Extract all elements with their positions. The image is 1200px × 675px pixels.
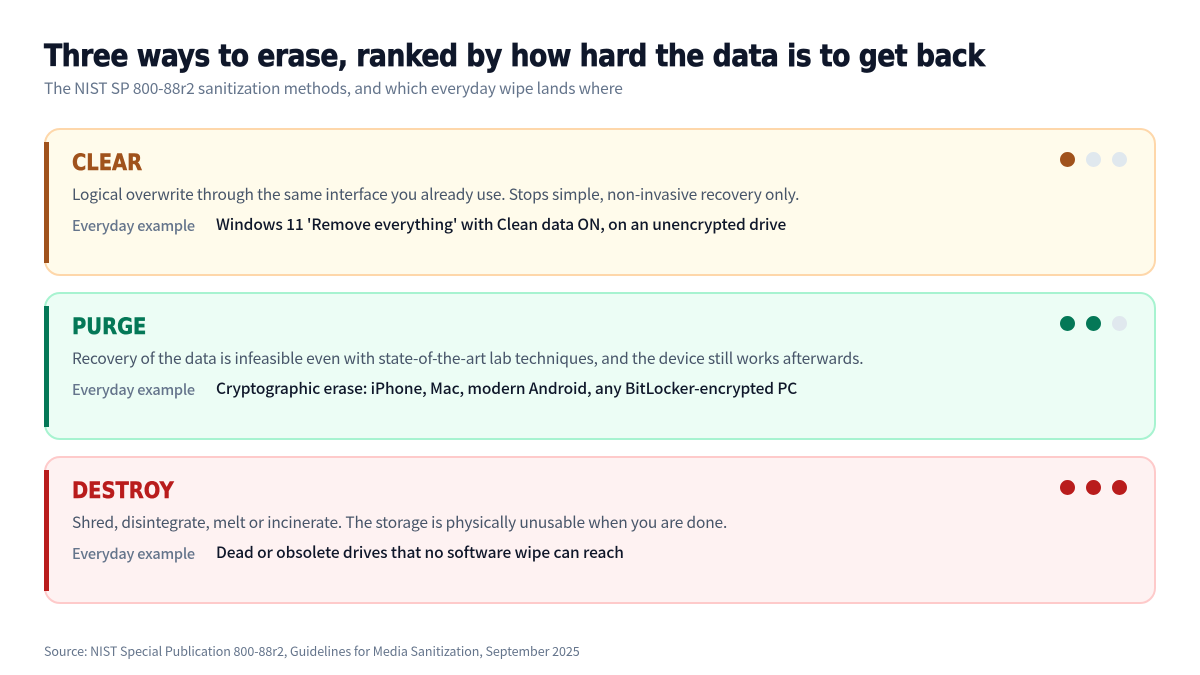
panel: clear: CLEAR <box>72 151 142 176</box>
title: Three ways to erase, ranked by how hard the data is to get back <box>44 39 984 74</box>
panel: destroy <box>44 456 1156 604</box>
panel: purge: Cryptographic erase: iPhone, Mac, modern Android, any BitLocker-encrypted PC <box>216 377 797 399</box>
panel: clear: Logical overwrite through the same interface you already use. Stops simple, non-invasive recovery only. <box>72 183 799 205</box>
panel: purge: PURGE <box>72 315 146 340</box>
panel: destroy: Everyday example <box>72 543 195 564</box>
panel: purge: Recovery of the data is infeasible even with state-of-the-art lab techniques, and the device still works afterwards. <box>72 347 863 369</box>
panel: clear: Everyday example <box>72 215 195 236</box>
panel: destroy: Shred, disintegrate, melt or incinerate. The storage is physically unusable when you are done. <box>72 511 727 533</box>
panel: clear <box>44 128 1156 276</box>
source note: Source: NIST Special Publication 800-88r2, Guidelines for Media Sanitization, September 2025 <box>44 641 580 660</box>
subtitle: The NIST SP 800-88r2 sanitization methods, and which everyday wipe lands where <box>44 77 623 99</box>
panel: destroy: DESTROY <box>72 479 174 504</box>
panel: purge <box>44 292 1156 440</box>
panel: purge: Everyday example <box>72 379 195 400</box>
panel: destroy: Dead or obsolete drives that no software wipe can reach <box>216 541 624 563</box>
panel: clear: Windows 11 'Remove everything' with Clean data ON, on an unencrypted drive <box>216 213 786 235</box>
